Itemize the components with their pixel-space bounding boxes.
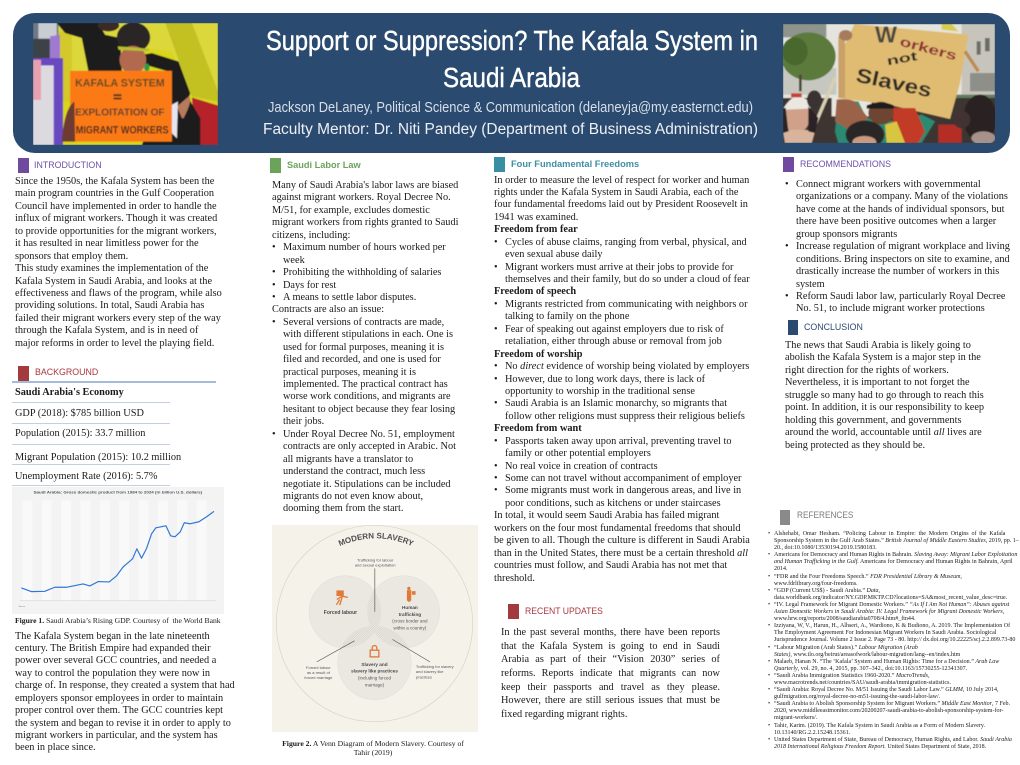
text: introduction: failed their migrant workers every step of the way	[15, 313, 221, 324]
text: introduction: it has resulted in near limitless power for the	[15, 238, 199, 249]
text: Saudi labor law: implemented. The practical contract has	[283, 379, 448, 390]
text: four fundamental freedoms: themselves and their family, but do so under a cloud of fear	[505, 274, 750, 285]
heading: Saudi Labor Law: Saudi Labor Law	[287, 160, 361, 171]
text: four fundamental freedoms: talking to family on the phone	[505, 311, 629, 322]
text: Saudi labor law: citizens, including: Contracts are also an issue:	[272, 230, 384, 315]
text: introduction: Council have implemented in order to handle the	[15, 201, 217, 212]
text: Saudi labor law: understand the contract, much less	[283, 466, 425, 477]
text: references: www.fdrlibrary.org/four-freedoms.	[774, 581, 858, 587]
icon: labor law marker	[270, 158, 281, 173]
text: Saudi labor law: Under Royal Decree No. 51, employment	[283, 429, 455, 440]
text: four fundamental freedoms: retaliation, either through abuse or removal from job	[505, 336, 722, 347]
Venn diagram: modern slavery: and slavery like	[416, 669, 444, 674]
text: four fundamental freedoms: No real voice in creation of contracts	[505, 461, 658, 472]
text: Saudi labor law: negotiate it. Stipulations can be included	[283, 478, 451, 490]
Venn diagram: modern slavery: Forced labour	[306, 665, 331, 670]
text: references: “IV. Legal Framework for Migrant Domestic Workers.” “As If I Am Not Human”: Abuses against	[774, 602, 1009, 608]
text: conclusion: around the world, accountable until all lives are	[785, 427, 982, 438]
text: Saudi labor law: Maximum number of hours worked per	[283, 242, 446, 253]
icon: conclusion marker	[788, 320, 798, 335]
text: four fundamental freedoms: poor conditions, such as kitchens or under staircases	[505, 498, 721, 509]
text: references: •	[768, 701, 770, 707]
title: Saudi Arabia	[443, 62, 581, 93]
text: references: Alshehabi, Omar Hesham. “Policing Labour in Empire: the Modern Origins of the Kafala	[774, 531, 1005, 537]
text: Saudi labor law: against migrant workers. Royal Decree No.	[272, 192, 451, 203]
text: four fundamental freedoms: Cycles of abuse claims, ranging from verbal, physical, and	[505, 237, 747, 248]
text: recommendations: •	[785, 241, 789, 252]
photo: Workers not Slaves protest sign: orkers	[898, 34, 958, 63]
text: four fundamental freedoms: •	[494, 324, 498, 335]
text: recent updates: that the Kafala System is going to end in Saudi	[501, 641, 720, 652]
text: references: •	[768, 552, 770, 558]
Venn diagram: modern slavery: and sexual exploitation	[355, 563, 396, 568]
text: Saudi labor law	[272, 180, 458, 514]
text: four fundamental freedoms: •	[494, 237, 498, 248]
Venn diagram: modern slavery: within a country)	[394, 626, 427, 631]
text: references: •	[768, 687, 770, 693]
text: Saudi labor law: •	[272, 280, 276, 290]
table: Saudi Arabia's economy: Population (2015): 33.7 million	[15, 428, 145, 439]
text: four fundamental freedoms: •	[494, 485, 498, 496]
text: four fundamental freedoms: Passports taken away upon arrival, preventing travel to	[505, 436, 731, 447]
text: Saudi labor law: M/51, for example, excludes domestic	[272, 205, 430, 216]
text: Saudi labor law: week	[283, 255, 305, 266]
text: background history: way to control the population they were now in	[15, 668, 210, 679]
icon: recommendations marker	[783, 157, 794, 172]
Venn diagram: modern slavery: forced marriage	[304, 675, 333, 680]
text: introduction: through the Kafala System, and is in need of	[15, 325, 198, 336]
text: references: 20., doi:10.1080/13530194.2019.1580183.	[774, 545, 877, 551]
text: Saudi labor law: Prohibiting the withholding of salaries	[283, 267, 441, 278]
text: references: “Saudi Arabia: Royal Decree No. M/51 Issuing the Saudi Labor Law.” GLMM, 10 July 2014,	[774, 687, 999, 693]
photo: Workers not Slaves protest sign: Slaves	[854, 65, 934, 102]
text: recent updates: However, there are still serious issues that must be	[501, 695, 720, 706]
table: Saudi Arabia's economy: Saudi Arabia's Economy	[15, 387, 124, 398]
text: four fundamental freedoms: •	[494, 361, 498, 372]
heading: four fundamental freedoms: Four Fundamental Freedoms	[511, 159, 639, 170]
line chart: Saudi GDP 1984 to 2024	[12, 487, 224, 614]
text: references: •	[768, 659, 770, 665]
heading: references: REFERENCES	[797, 510, 853, 521]
Venn diagram: modern slavery: Forced labour	[324, 610, 357, 616]
text: four fundamental freedoms: •	[494, 436, 498, 447]
text: recommendations	[785, 179, 1010, 314]
text: introduction: Since the 1950s, the Kafala System has been the	[15, 176, 214, 187]
text: recommendations: conditions. Bring inspectors on site to examine, and	[796, 254, 1010, 265]
text: references: www.macrotrends.net/countries/SAU/saudi-arabia/immigration-statistics.	[774, 680, 951, 686]
text: four fundamental freedoms: •	[494, 374, 498, 384]
caption: figure 1: Figure 1. Saudi Arabia’s Rising GDP. Courtesy of the World Bank	[15, 616, 221, 625]
text: four fundamental freedoms: •	[494, 398, 498, 409]
text: recommendations: No. 51, to include migrant worker protections	[796, 303, 985, 314]
line chart: Saudi GDP 1984 to 2024: Source	[19, 606, 26, 608]
text: four fundamental freedoms: Freedom of speech	[494, 286, 576, 297]
text: Saudi labor law: •	[272, 317, 276, 328]
text: Saudi labor law: A means to settle labor disputes.	[283, 292, 416, 303]
text: recommendations: system	[796, 278, 825, 290]
text: background history: century. The British Empire had expanded their	[15, 643, 211, 654]
text: four fundamental freedoms: follow other religions must suppress their religious beliefs	[505, 411, 745, 422]
text: recommendations: •	[785, 179, 789, 190]
text: background history: charge of. In response, they created a system that had	[15, 680, 235, 691]
text: Saudi labor law: •	[272, 429, 276, 440]
heading: introduction: INTRODUCTION	[34, 160, 102, 171]
Venn diagram: modern slavery: Slavery and	[361, 662, 388, 667]
title: Faculty Mentor: Dr. Niti Pandey (Department of Business Administration)	[263, 121, 758, 138]
text: four fundamental freedoms: 1941 was examined. In total, it would seem Saudi Arabia has failed migrant	[494, 212, 719, 521]
line chart: Saudi GDP 1984 to 2024: Saudi Arabia: Gross domestic product from 1984 to 2024 (in billion U.S. dollars)	[34, 491, 202, 495]
text: introduction: sponsors that employ them.	[15, 251, 128, 262]
text: four fundamental freedoms: Saudi Arabia is an Islamic monarchy, so migrants that	[505, 398, 727, 409]
text: Saudi labor law: their jobs.	[283, 416, 324, 427]
text: background history: been in place since.	[15, 742, 96, 753]
text: Saudi labor law: Many of Saudi Arabia's labor laws are biased	[272, 180, 458, 191]
text: four fundamental freedoms: However, due to long work days, there is lack of	[505, 374, 705, 384]
table: Saudi Arabia's economy: GDP (2018): $785 billion USD	[15, 408, 144, 419]
text: four fundamental freedoms: than in the United States, there must be a certain threshold all	[494, 548, 748, 559]
text: conclusion: struggle so many had to go through to reach this	[785, 390, 984, 401]
text: references: 10.13140/RG.2.2.15248.15361.	[774, 730, 850, 736]
text: references: •	[768, 602, 770, 608]
text: references: migrant-workers/.	[774, 715, 817, 721]
text: four fundamental freedoms: •	[494, 299, 498, 310]
text: Saudi labor law: •	[272, 242, 276, 253]
text: four fundamental freedoms: Some migrants must work in dangerous areas, and live in	[505, 485, 741, 496]
photo: woman holding Kafala protest sign: EXPLOITATION OF	[75, 108, 165, 119]
text: references: The Employment Agreement For Indonesian Migrant Workers In Saudi Arabia. Sociological	[774, 630, 996, 636]
text: references: 2014.	[774, 566, 788, 572]
text: introduction	[15, 176, 222, 349]
text: introduction: effectiveness and flaws of the program, while also	[15, 288, 222, 299]
text: four fundamental freedoms: •	[494, 461, 498, 472]
table: Saudi Arabia's economy: Unemployment Rate (2016): 5.7%	[15, 470, 157, 482]
text: references: Jurisprudence Journal. Volume 2 Issue 2. Page 73 - 80. http:// dx.doi.org/10.22225/scj.2.2.899.73-80	[774, 637, 1015, 643]
text: Saudi labor law: •	[272, 267, 276, 278]
text: recommendations: Connect migrant workers with governmental	[796, 179, 981, 190]
text: references: •	[768, 574, 770, 580]
text: references: •	[768, 588, 770, 594]
text: references: United States Department of State, Bureau of Democracy, Human Rights, and Labor. Saudi Arabia	[774, 737, 1012, 743]
Venn diagram: modern slavery: (cross border and	[392, 618, 428, 623]
text: references: 2018 International Religious Freedom Report. United States Department of State, 2018.	[774, 744, 986, 750]
text: four fundamental freedoms: Fear of speaking out against employers due to risk of	[505, 324, 724, 335]
text: introduction: Kafala System in Saudi Arabia, and looks at the	[15, 276, 212, 286]
text: references: •	[768, 531, 770, 537]
text: background history: power over several GCC countries, and needed a	[15, 655, 216, 666]
text: introduction: main program countries in the Gulf Cooperation	[15, 188, 214, 199]
text: introduction: major reforms in order to level the playing field.	[15, 338, 214, 349]
text: references: Sponsorship System in the Gulf Arab States.” British Journal of Middle Eastern Studies, 2019, pp. 1–	[774, 538, 1019, 544]
table: Saudi Arabia's economy: Migrant Population (2015): 10.2 million	[15, 452, 181, 463]
icon: background marker	[18, 366, 29, 381]
photo: woman holding Kafala protest sign	[33, 23, 218, 145]
text: references: “Labour Migration (Arab States).” Labour Migration (Arab	[774, 644, 918, 650]
text: references: and Human Trafficking in the Gulf. Americans for Democracy and Human Rights in Bahrain, April	[774, 559, 1013, 565]
Venn diagram: modern slavery: Trafficking for labour	[357, 558, 394, 563]
text: introduction: This study examines the implementation of the	[15, 263, 208, 274]
text: references: gulfmigration.org/royal-decree-no-m51-issuing-the-saudi-labor-law/.	[774, 694, 940, 700]
icon: references marker	[780, 510, 790, 525]
text: Saudi labor law: •	[272, 292, 276, 303]
text: Saudi labor law: migrant workers from rights granted to Saudi	[272, 217, 458, 228]
Venn diagram: modern slavery: MODERN SLAVERY	[338, 532, 414, 546]
text: recommendations: there have been positive outcomes when a larger	[796, 216, 996, 227]
text: conclusion: abolish the Kafala System is a major step in the	[785, 352, 981, 363]
text: recommendations: Increase regulation of migrant workplace and living	[796, 241, 1010, 252]
text: conclusion	[785, 340, 984, 450]
text: Saudi labor law: migrants do not even know about,	[283, 491, 423, 502]
header banner	[13, 13, 1010, 153]
text: Saudi labor law: worse work conditions, and migrants are	[283, 391, 451, 402]
text: Saudi labor law: used for formal purposes, meaning it is	[283, 342, 444, 353]
text: background history: migrant workers in particular, and the system has	[15, 730, 218, 741]
text: recent updates: Arabia as part of their “Vision 2030” series of	[501, 654, 720, 665]
text: recommendations: have come at the hands of individual sponsors, but	[796, 204, 1004, 215]
text: references: •	[768, 623, 770, 629]
text: conclusion: point. In addition, it is our responsibility to keep	[785, 402, 984, 413]
text: references: data.worldbank.org/indicator/NY.GDP.MKTP.CD?locations=SA&most_recent_value_desc=true.	[774, 595, 1007, 601]
text: four fundamental freedoms: No direct evidence of worship being violated by employers	[505, 361, 749, 372]
text: recommendations: organizations or a company. Many of the violations	[796, 191, 1008, 202]
text: Saudi labor law: hesitant to object because they fear losing	[283, 404, 455, 415]
text: recommendations: Reform Saudi labor law, particularly Royal Decree	[796, 291, 1005, 302]
heading: recent updates: RECENT UPDATES	[525, 606, 603, 617]
text: references: “Saudi Arabia to Abolish Sponsorship System for Migrant Workers.” Middle East Monitor, 7 Feb.	[774, 701, 1010, 707]
text: four fundamental freedoms: Freedom from fear	[494, 224, 578, 235]
Venn diagram: modern slavery: Trafficking for slavery	[416, 664, 454, 669]
caption: figure 2: Figure 2. A Venn Diagram of Modern Slavery. Courtesy of	[282, 739, 464, 748]
text: Saudi labor law: filed and recorded, and one is used for	[283, 354, 441, 365]
text: recommendations: group sponsors migrants	[796, 229, 897, 240]
text: recent updates	[501, 627, 720, 720]
text: references: “Saudi Arabia Immigration Statistics 1960-2020.” MacroTrends,	[774, 673, 929, 679]
heading: background: BACKGROUND	[35, 367, 98, 378]
text: four fundamental freedoms: •	[494, 262, 498, 273]
text: recent updates: fixed regarding migrant rights.	[501, 709, 627, 720]
text: references: www.hrw.org/reports/2008/saudiarabia0708/4.htm#_ftn44.	[774, 616, 915, 622]
text: Saudi labor law: practical purposes, meaning it is	[283, 367, 416, 378]
Venn diagram: modern slavery: Human	[402, 605, 418, 610]
text: references: Malaeb, Hanan N. “The ‘Kafala’ System and Human Rights: Time for a Decision.” Arab Law	[774, 659, 999, 665]
photo: woman holding Kafala protest sign: MIGRANT WORKERS	[76, 124, 169, 136]
text: references: 2020, www.middleeastmonitor.com/20200207-saudi-arabia-to-abolish-sponsorship-system-for-	[774, 708, 1003, 714]
text: references: Asian Domestic Workers in Saudi Arabia: IV. Legal Framework for Migrant Domestic Workers,	[774, 609, 1004, 615]
text: four fundamental freedoms: be given to all. Though the culture is different in Saudi Arabia	[494, 535, 750, 546]
text: references: States), www.ilo.org/beirut/areasofwork/labour-migration/lang--en/index.htm	[774, 652, 960, 658]
text: introduction: providing solutions. In total, Saudi Arabia has	[15, 300, 204, 311]
text: conclusion: Nevertheless, it is important to not forget the	[785, 377, 970, 388]
text: Saudi labor law: with different stipulations in each. One is	[283, 329, 453, 340]
text: four fundamental freedoms: even sexual abuse daily	[505, 249, 602, 260]
text: background history: the system and began to revise it in order to apply to	[15, 718, 231, 729]
text: four fundamental freedoms: four fundamental freedoms laid out by President Roosevelt in	[494, 199, 748, 210]
table: Saudi Arabia's economy	[12, 387, 181, 486]
text: recent updates: keep their passports and travel as they please.	[501, 682, 720, 693]
text: four fundamental freedoms: workers on the four most fundamental freedoms that should	[494, 523, 740, 534]
text: background history	[15, 630, 235, 753]
text: four fundamental freedoms: In order to measure the level of respect for worker and human	[494, 174, 749, 186]
photo: Workers not Slaves protest sign: not	[886, 49, 920, 68]
text: conclusion: right direction for the rights of workers.	[785, 365, 949, 376]
text: four fundamental freedoms: Freedom from want	[494, 423, 582, 434]
text: Saudi labor law: dooming them from the start.	[283, 503, 403, 514]
text: references: •	[768, 723, 770, 729]
photo: woman holding Kafala protest sign: KAFALA SYSTEM	[75, 78, 165, 90]
Venn diagram: modern slavery: practices	[416, 675, 432, 680]
text: references: Americans for Democracy and Human Rights in Bahrain. Slaving Away: Migrant Labor Exploitation	[774, 552, 1017, 558]
text: references: “GDP (Current US$) - Saudi Arabia.” Data,	[774, 588, 880, 594]
icon: freedoms marker	[494, 157, 505, 172]
Venn diagram: modern slavery	[272, 525, 478, 732]
text: four fundamental freedoms: Freedom of worship	[494, 349, 582, 360]
text: background history: The Kafala System began in the late nineteenth	[15, 630, 210, 642]
text: Saudi labor law: contracts are only accepted in Arabic. Not	[283, 441, 456, 452]
text: background history: proper control over them. The GCC countries kept	[15, 705, 223, 716]
text: conclusion: holding this government, and governments	[785, 415, 961, 426]
text: references: Quarterly, vol. 29, no. 4, 2015, pp. 307–342., doi:10.1163/15730255-12341307.	[774, 666, 967, 672]
text: conclusion: The news that Saudi Arabia is likely going to	[785, 340, 971, 351]
text: references: Izziyana, W, V., Harun, H., Alhseri, A., Wardiono, K & Budiono, A. 2019. The Implementation Of	[774, 623, 1010, 629]
text: Saudi labor law: Days for rest	[283, 280, 336, 290]
text: four fundamental freedoms: threshold.	[494, 572, 535, 584]
Venn diagram: modern slavery: (including forced	[358, 676, 391, 681]
text: four fundamental freedoms	[494, 174, 750, 584]
text: references: •	[768, 673, 770, 679]
text: four fundamental freedoms: family or other potential employers	[505, 448, 651, 459]
Venn diagram: modern slavery: as a result of	[307, 670, 331, 675]
text: references: Tahir, Karim. (2019). The Kafala System in Saudi Arabia as a Form of Modern Slavery.	[774, 723, 985, 729]
text: four fundamental freedoms: •	[494, 473, 498, 484]
heading: recommendations: RECOMMENDATIONS	[800, 159, 891, 170]
text: background history: employers sponsor employees in order to maintain	[15, 693, 223, 704]
heading: conclusion: CONCLUSION	[804, 322, 863, 333]
text: four fundamental freedoms: Some can not travel without accompaniment of employer	[505, 473, 741, 484]
Venn diagram: modern slavery: marriage)	[365, 682, 385, 687]
icon: introduction marker	[18, 158, 29, 173]
Venn diagram: modern slavery: trafficking	[399, 612, 421, 617]
photo: Workers not Slaves protest sign	[783, 24, 995, 143]
text: references	[768, 530, 1019, 750]
text: recommendations: •	[785, 291, 789, 302]
caption: figure 2: Tahir (2019)	[354, 748, 392, 757]
caption: figure 2	[282, 739, 464, 757]
text: four fundamental freedoms: countries must follow, and Saudi Arabia has not met that	[494, 560, 727, 571]
text: Saudi labor law: Several versions of contracts are made,	[283, 317, 444, 328]
text: recent updates: In the past several months, there have been reports	[501, 627, 720, 638]
icon: recent updates marker	[508, 604, 519, 619]
Venn diagram: modern slavery: slavery like practices	[351, 669, 398, 674]
text: introduction: influx of migrant workers. Though it was created	[15, 213, 217, 224]
text: four fundamental freedoms: rights under the Kafala System in Saudi Arabia, each of the	[494, 187, 738, 198]
text: introduction: to provide opportunities for the migrant workers,	[15, 226, 217, 237]
title	[263, 25, 758, 138]
text: four fundamental freedoms: Migrant workers must arrive at their jobs to provide for	[505, 262, 733, 273]
text: four fundamental freedoms: opportunity to worship in the traditional sense	[505, 386, 695, 397]
text: conclusion: being protected as they should be.	[785, 440, 925, 450]
text: four fundamental freedoms: Migrants restricted from communicating with neighbors or	[505, 299, 748, 310]
text: references: “FDR and the Four Freedoms Speech.” FDR Presidential Library & Museum,	[774, 574, 962, 580]
text: references: •	[768, 737, 770, 743]
text: references: •	[768, 644, 770, 650]
text: recent updates: reforms. Reports indicate that migrants can now	[501, 668, 720, 679]
text: Saudi labor law: all migrants have a translator to	[283, 454, 413, 465]
text: recommendations: drastically increase the number of workers in this	[796, 266, 999, 277]
